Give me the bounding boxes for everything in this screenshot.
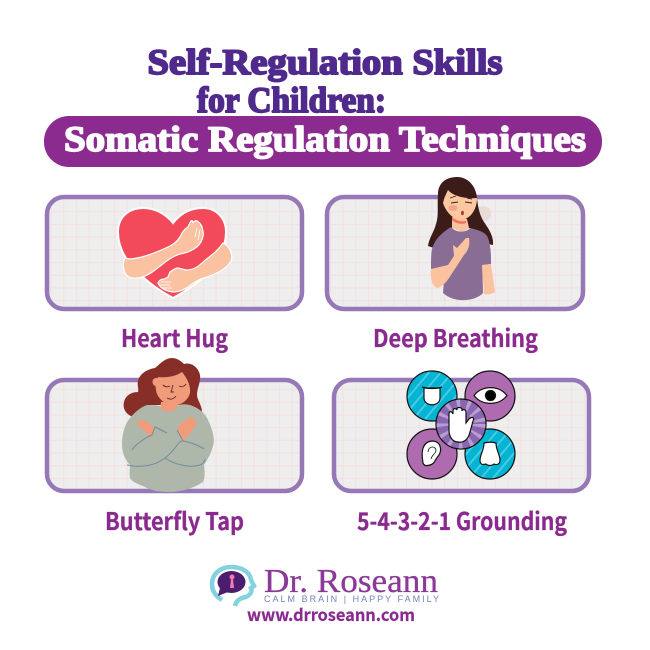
title: for Children: [197, 80, 386, 120]
icon: five senses [407, 371, 515, 479]
icon: tongue [407, 371, 457, 421]
icon: woman breathing [428, 177, 495, 300]
card frame [327, 197, 583, 309]
icon: hand [436, 399, 486, 449]
label: Heart Hug [121, 319, 228, 354]
label: Deep Breathing [373, 319, 538, 354]
title: Self-Regulation Skills [148, 42, 502, 82]
card frame [47, 197, 302, 309]
panel: butterfly tap [47, 358, 302, 492]
icon: head and speech bubble [212, 567, 254, 606]
card frame [334, 380, 589, 491]
title [148, 42, 502, 120]
subtitle banner: Somatic Regulation Techniques [64, 119, 586, 159]
website url: www.drroseann.com [247, 601, 415, 626]
icon: ear [407, 429, 457, 479]
icon: eye [465, 371, 515, 421]
tagline: CALM BRAIN | HAPPY FAMILY [264, 594, 439, 604]
icon: heart with hugging arms [118, 208, 232, 298]
logo [212, 563, 439, 606]
label: 5-4-3-2-1 Grounding [357, 502, 567, 537]
label: Butterfly Tap [105, 502, 244, 537]
subtitle banner [44, 116, 602, 167]
panel: deep breathing [327, 177, 583, 309]
card frame [47, 380, 302, 491]
icon: nose [465, 429, 515, 479]
icon: woman self hug [122, 358, 214, 492]
panel: grounding [334, 371, 589, 491]
panel: heart hug [47, 197, 302, 309]
brand name: Dr. Roseann [264, 563, 438, 600]
